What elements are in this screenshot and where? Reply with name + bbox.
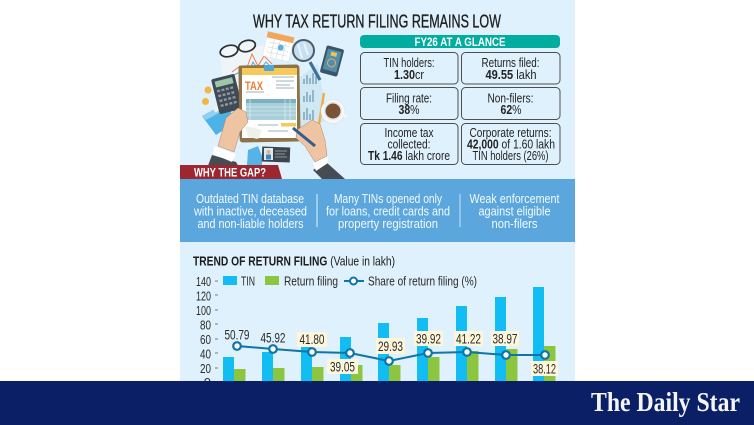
ribbon: why the gap: WHY THE GAP? [194, 166, 266, 180]
line: share of return filing [233, 342, 549, 365]
gap reason 1: with inactive, deceased [193, 204, 307, 218]
y axis: 20 [200, 361, 211, 376]
stat: returns filed: 49.55 lakh [486, 68, 537, 82]
gap reason 2: property registration [338, 217, 438, 231]
illustration: clipboard with tax form [238, 64, 301, 143]
panel: why the gap [180, 165, 575, 242]
y axis: 0 [204, 375, 211, 390]
y axis: 60 [200, 332, 211, 347]
y axis: 100 [196, 303, 211, 318]
stat: returns filed [462, 52, 560, 84]
data labels: 41.80 [300, 332, 324, 347]
data labels: 45.92 [260, 330, 286, 346]
gap reason 3: against eligible [478, 204, 551, 218]
y axis [196, 274, 218, 390]
stat: TIN holders: 1.30cr [394, 68, 424, 82]
stat: returns filed: Returns filed: [482, 56, 540, 70]
stat: income tax collected [360, 124, 458, 164]
illustration: graph paper [220, 44, 276, 102]
banner heading: FY26 AT A GLANCE [414, 35, 506, 49]
chart: trend of return filing [196, 274, 558, 390]
panel: FY26 at a glance [360, 35, 560, 164]
title: WHY TAX RETURN FILING REMAINS LOW [253, 10, 501, 32]
illustration: chart sheet [296, 64, 327, 128]
icon: pen [293, 128, 315, 146]
legend: TIN [241, 274, 255, 288]
icon: magnifier [293, 40, 320, 80]
icon: pencil [319, 93, 324, 124]
chart heading: TREND OF RETURN FILING (Value in lakh) [193, 254, 395, 268]
stat: income tax collected: collected: [388, 138, 430, 152]
bars: TIN [223, 287, 544, 381]
stat: filing rate: Filing rate: [386, 92, 432, 106]
gap reason 1 [193, 192, 307, 231]
illustration: left hand and sleeve [203, 108, 248, 179]
gap reason 2: for loans, credit cards and [326, 204, 450, 218]
gap reason 3 [470, 192, 560, 231]
stat: income tax collected: Income tax [384, 126, 434, 140]
footer band with logo [0, 381, 754, 425]
icon: wallet [202, 102, 236, 135]
data labels: 50.79 [224, 328, 250, 342]
stat: TIN holders [360, 52, 458, 84]
gap reason 3: Weak enforcement [470, 192, 560, 206]
icon: glasses [219, 38, 257, 59]
stat: corporate returns: TIN holders (26%) [472, 149, 548, 163]
icon: coins [202, 86, 212, 105]
data labels [224, 328, 558, 376]
legend [223, 274, 477, 288]
data labels: 39.92 [416, 332, 441, 346]
y axis: 40 [200, 346, 211, 362]
icon: coffee cup [321, 100, 347, 124]
y axis: 120 [196, 288, 211, 304]
stat: filing rate: 38% [398, 103, 420, 117]
legend: Share of return filing (%) [368, 274, 477, 288]
legend: Return filing [284, 274, 338, 288]
stat: corporate returns: Corporate returns: [470, 126, 552, 140]
stat: income tax collected: Tk 1.46 lakh crore [368, 149, 450, 163]
stat: corporate returns [462, 124, 560, 164]
icon: hex badge [247, 146, 262, 172]
data labels: 29.93 [378, 339, 403, 354]
icon: phone [320, 45, 344, 77]
icon: calculator [211, 74, 243, 114]
gap reason 1: and non-liable holders [198, 217, 304, 231]
stat: non-filers: Non-filers: [488, 92, 534, 106]
form heading: TAX: TAX [245, 79, 263, 93]
stat: corporate returns: 42,000 of 1.60 lakh [467, 138, 555, 152]
gap reason 2 [326, 192, 450, 231]
gap reason 2: Many TINs opened only [334, 192, 443, 206]
y axis: 140 [196, 274, 211, 289]
icon: ID card [262, 147, 290, 162]
illustration: right hand and sleeve [293, 120, 345, 179]
illustration: tax paperwork on desk [202, 31, 347, 179]
stat: non-filers: 62% [500, 103, 522, 117]
gap reason 3: non-filers [492, 217, 538, 231]
blue band [180, 179, 575, 242]
data labels: 38.97 [492, 332, 518, 346]
data labels: 38.12 [533, 362, 556, 376]
icon: calendar [262, 31, 294, 62]
y axis: 80 [200, 318, 211, 332]
stat: TIN holders: TIN holders: [384, 56, 434, 70]
data labels: 41.22 [456, 332, 481, 346]
stat: non-filers [462, 88, 560, 120]
gap reason 1: Outdated TIN database [196, 192, 304, 206]
stat: filing rate [360, 88, 458, 120]
bars: return filing [234, 346, 556, 381]
banner heading [360, 35, 560, 49]
data labels: 39.05 [330, 360, 355, 374]
